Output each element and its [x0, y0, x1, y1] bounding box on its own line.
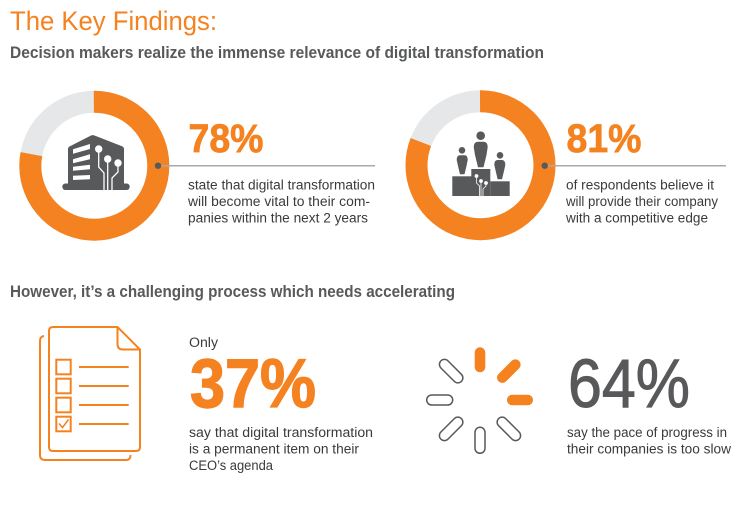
- description: 81%: of respondents believe it: [566, 177, 714, 192]
- description: 78%: will become vital to their com-: [187, 194, 370, 209]
- description: 64%: [567, 425, 731, 456]
- icon: digital building: [62, 135, 130, 190]
- heading: relevance: Decision makers realize the immense relevance of digital transformation: [10, 43, 544, 62]
- panel: 81 percent: [416, 101, 726, 229]
- description: 78%: [187, 177, 375, 226]
- stat: 37%: 37%: [190, 345, 316, 422]
- panel: 37 percent: [40, 327, 373, 473]
- donut chart: 78%: [30, 102, 158, 230]
- description: 78%: panies within the next 2 years: [188, 211, 368, 226]
- description: 81%: [565, 177, 718, 226]
- donut chart: 81%: [416, 101, 544, 229]
- panel: 78 percent: [30, 102, 375, 230]
- stat: 81%: 81%: [566, 117, 642, 161]
- description: 37%: CEO’s agenda: [189, 458, 273, 473]
- description: 78%: state that digital transformation: [188, 177, 375, 192]
- description: 64%: their companies is too slow: [567, 442, 731, 456]
- connector line: [155, 162, 375, 169]
- label: Only: Only: [189, 335, 218, 350]
- icon: checklist document: [40, 327, 140, 460]
- connector line: [542, 162, 726, 169]
- description: 37%: say that digital transformation: [189, 425, 373, 440]
- description: 81%: with a competitive edge: [565, 211, 708, 226]
- title: The Key Findings:: [10, 6, 217, 36]
- icon: progress spinner: [427, 347, 533, 453]
- description: 64%: say the pace of progress in: [567, 425, 727, 440]
- stat: 64%: 64%: [568, 345, 690, 422]
- description: 81%: will provide their company: [565, 194, 718, 209]
- icon: people on podium: [452, 131, 510, 196]
- stat: 78%: 78%: [188, 117, 264, 161]
- description: 37%: is a permanent item on their: [189, 442, 360, 456]
- panel: 64 percent: [427, 345, 731, 456]
- heading: challenging process: However, it’s a challenging process which needs accelerating: [10, 282, 455, 301]
- description: 37%: [189, 425, 373, 473]
